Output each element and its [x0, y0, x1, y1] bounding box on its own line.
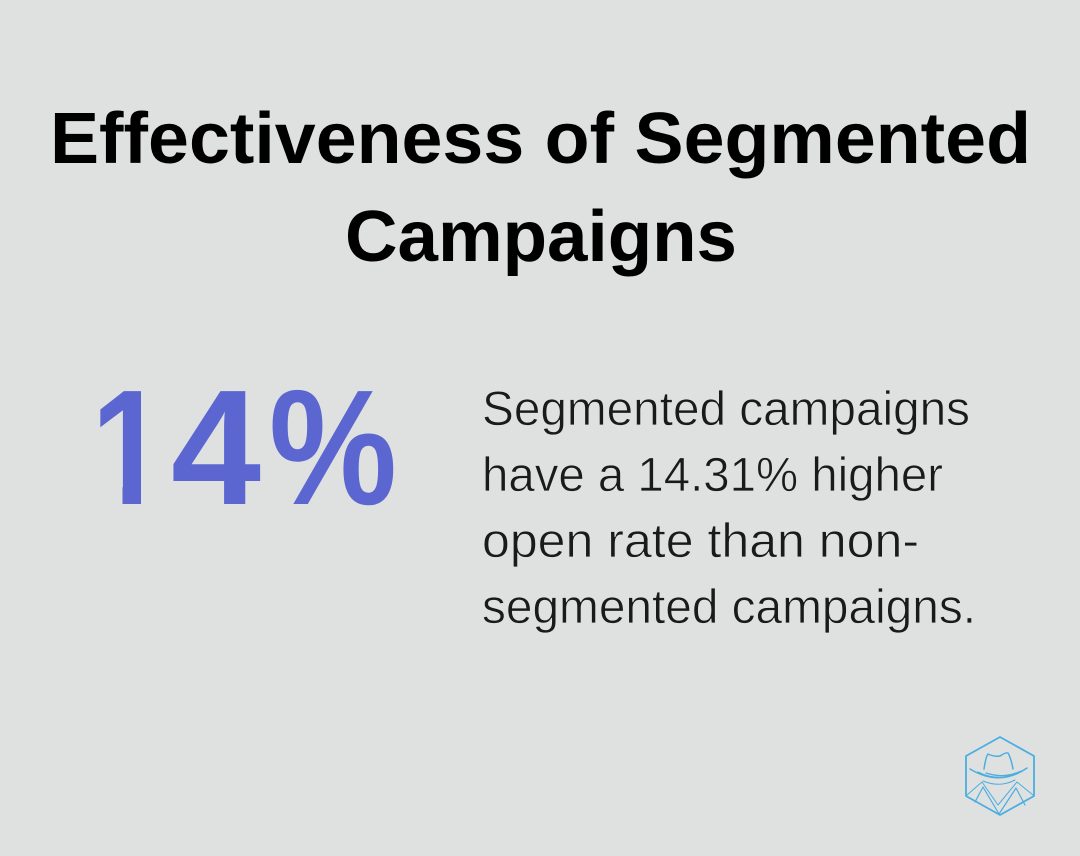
statistic description: open rate than non- [482, 515, 919, 568]
title [50, 99, 1031, 277]
statistic description: Segmented campaigns [482, 383, 970, 436]
statistic description: have a 14.31% higher [482, 449, 943, 502]
title: Effectiveness of Segmented [50, 99, 1031, 179]
statistic description [482, 383, 976, 634]
statistic description: segmented campaigns. [482, 581, 976, 634]
big statistic: 14%: % [269, 356, 397, 539]
big statistic: 14%: 1 [91, 356, 167, 539]
icon: hexagon spy logo [966, 737, 1034, 815]
infographic canvas [54, 110, 1035, 816]
title: Campaigns [345, 197, 737, 277]
big statistic: 14% [100, 390, 394, 506]
big statistic: 14%: 4 [171, 356, 261, 539]
